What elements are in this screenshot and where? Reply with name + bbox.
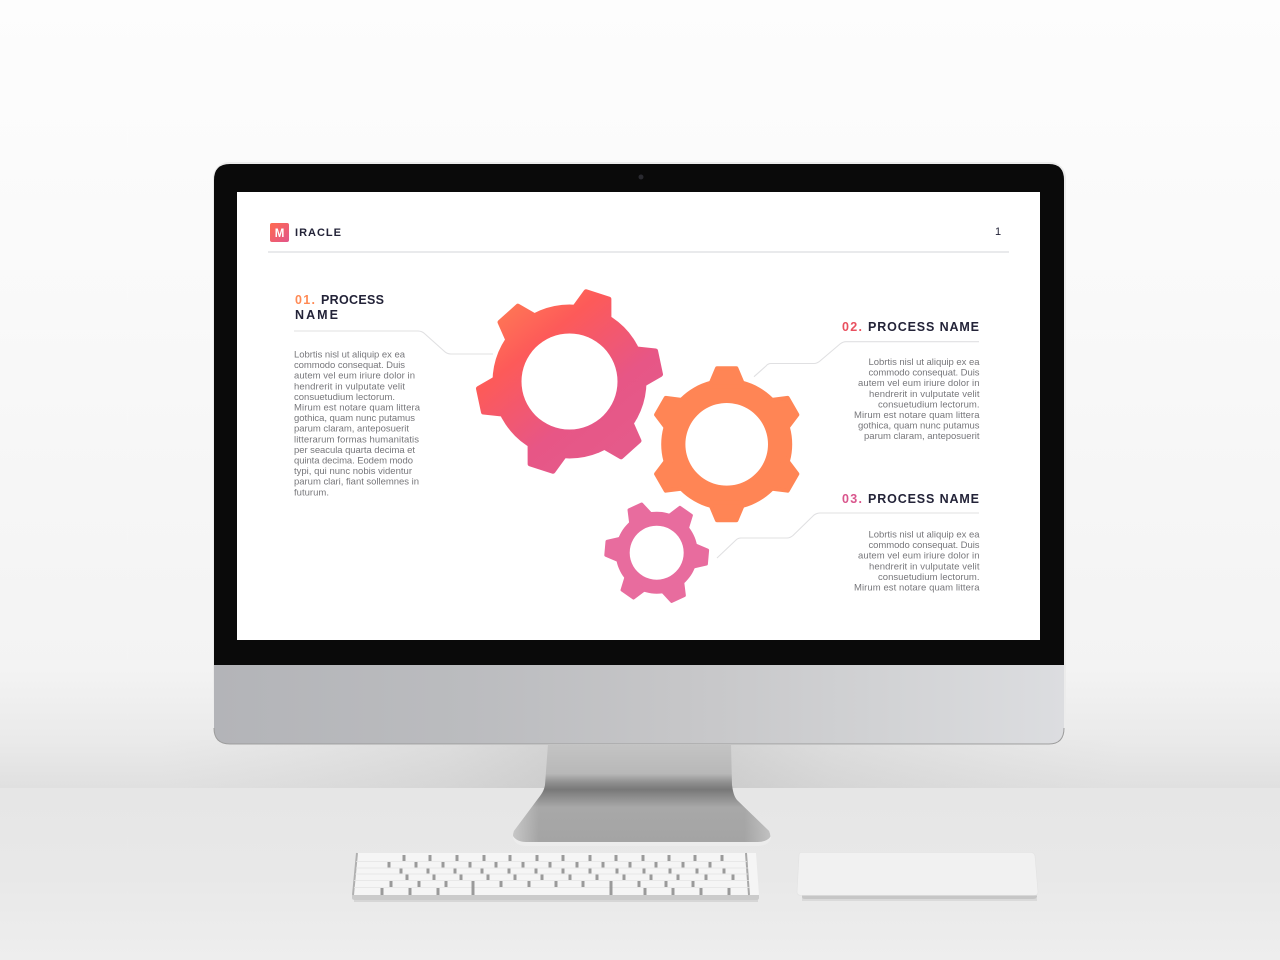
process 01 body text: autem vel eum iriure dolor in — [294, 371, 415, 382]
large gradient gear — [476, 289, 663, 474]
monitor stand — [513, 744, 771, 846]
process 03 body text: hendrerit in vulputate velit — [869, 561, 980, 572]
monitor — [213, 162, 1066, 745]
process 03 body text: commodo consequat. Duis — [868, 540, 980, 551]
process 01 body text — [294, 350, 421, 498]
process 03 heading: PROCESS NAME — [868, 492, 979, 506]
monitor chin — [214, 665, 1064, 744]
monitor shadow on wall — [160, 740, 1120, 788]
process 01 heading: 01. — [295, 293, 315, 307]
process 03 body text: consuetudium lectorum. — [878, 572, 980, 583]
process 03 body text: Lobrtis nisl ut aliquip ex ea — [868, 530, 980, 540]
page number: 1 — [995, 226, 1001, 238]
process 02 body text: parum claram, anteposuerit — [864, 431, 980, 442]
process 01 body text: per seacula quarta decima et — [294, 445, 415, 456]
logo mark — [270, 223, 289, 242]
process 02 heading: PROCESS NAME — [868, 320, 979, 334]
trackpad — [797, 852, 1038, 901]
process 01 body text: quinta decima. Eodem modo — [294, 456, 413, 466]
process 03 body text: autem vel eum iriure dolor in — [858, 551, 980, 562]
process 01 — [294, 293, 421, 498]
process 02 body text: Lobrtis nisl ut aliquip ex ea — [868, 357, 980, 368]
medium orange gear — [652, 368, 801, 520]
process 02 body text: autem vel eum iriure dolor in — [858, 378, 980, 389]
webcam — [638, 174, 644, 180]
process 01 body text: futurum. — [294, 487, 329, 498]
process 02 — [842, 320, 980, 442]
monitor bezel — [214, 164, 1064, 665]
process 01 body text: litterarum formas humanitatis — [294, 434, 419, 445]
small pink gear — [605, 502, 708, 604]
process 02 body text: gothica, quam nunc putamus — [858, 421, 980, 432]
keyboard shadow — [354, 899, 758, 902]
monitor body edge — [213, 162, 1066, 745]
connector lines — [294, 331, 979, 558]
trackpad top surface — [797, 852, 1038, 896]
screen — [237, 192, 1040, 640]
process 01 body text: parum clari, fiant sollemnes in — [294, 477, 419, 488]
process 02 body text: consuetudium lectorum. — [878, 399, 980, 410]
process 01 body text: consuetudium lectorum. — [294, 392, 395, 403]
slide header — [268, 223, 1009, 252]
keyboard body — [352, 853, 759, 899]
process 01 body text: typi, qui nunc nobis videntur — [294, 466, 412, 477]
logo letter: M — [275, 228, 284, 240]
process 02 heading: 02. — [842, 320, 862, 334]
process 02 body text: Mirum est notare quam littera — [854, 410, 980, 421]
process 01 heading — [295, 293, 384, 322]
process 01 body text: commodo consequat. Duis — [294, 360, 405, 371]
process 03 — [842, 492, 980, 594]
process 03 body text: Mirum est notare quam littera — [854, 582, 980, 594]
process 01 heading: NAME — [295, 308, 338, 322]
process 01 body text: Mirum est notare quam littera — [294, 402, 421, 414]
trackpad shadow — [802, 898, 1037, 901]
process 01 heading: PROCESS — [321, 293, 384, 307]
process 01 body text: Lobrtis nisl ut aliquip ex ea — [294, 350, 406, 360]
process 03 body text — [854, 530, 980, 594]
process 03 heading: 03. — [842, 492, 862, 506]
keyboard row gaps — [354, 862, 750, 888]
trackpad front edge — [802, 896, 1037, 899]
process 01 body text: hendrerit in vulputate velit — [294, 381, 405, 392]
keyboard keys — [382, 855, 733, 895]
process 02 body text: commodo consequat. Duis — [868, 368, 980, 379]
process 02 body text — [854, 357, 980, 442]
desk surface — [0, 788, 1280, 960]
logo wordmark: IRACLE — [295, 227, 341, 239]
keyboard — [352, 853, 759, 902]
process 01 body text: gothica, quam nunc putamus — [294, 413, 415, 424]
process 02 body text: hendrerit in vulputate velit — [869, 389, 980, 400]
process 01 body text: parum claram, anteposuerit — [294, 424, 409, 435]
